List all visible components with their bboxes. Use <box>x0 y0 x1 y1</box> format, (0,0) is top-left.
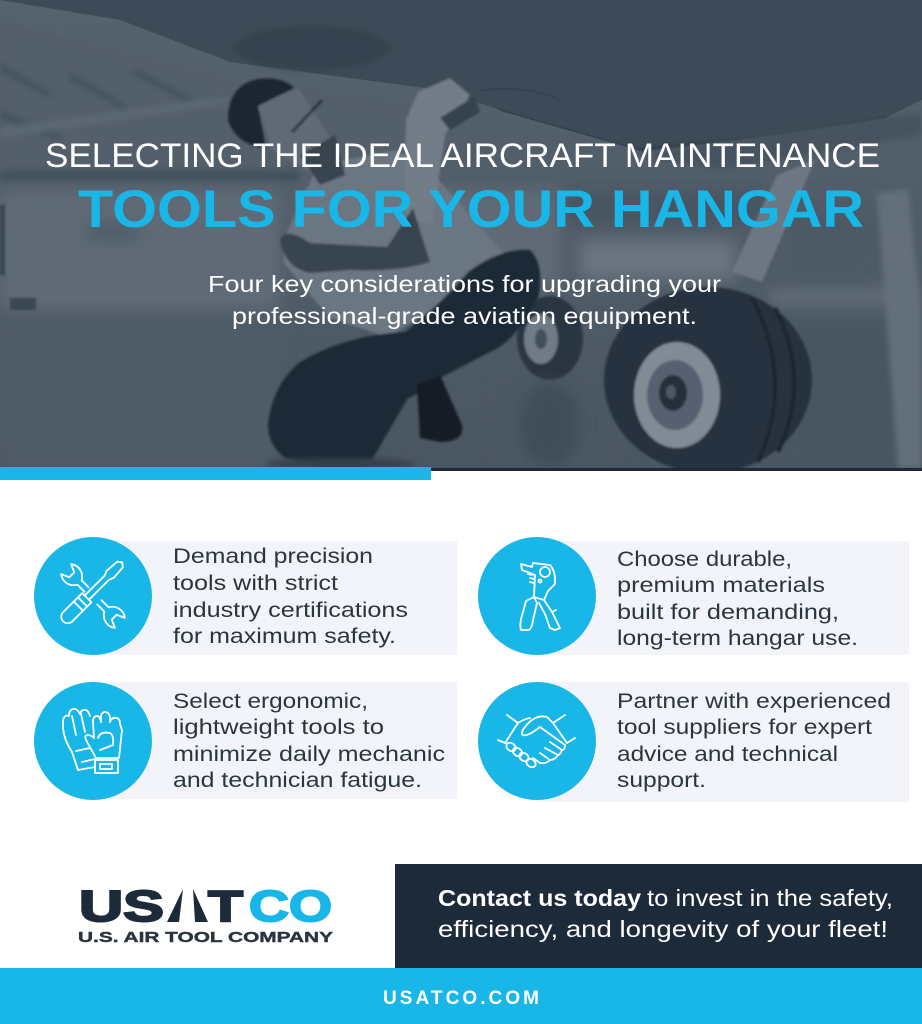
hero accent bar <box>0 467 431 480</box>
text: and technician fatigue. <box>173 769 422 792</box>
boot <box>417 375 462 442</box>
panel: call to action <box>395 864 922 968</box>
hero photo: aircraft mechanic under wing <box>0 0 922 473</box>
text: Choose durable, <box>617 548 792 571</box>
icon: handshake <box>498 715 575 769</box>
text: long-term hangar use. <box>617 627 858 650</box>
text: Select ergonomic, <box>173 690 368 713</box>
panel: durable materials <box>478 537 909 655</box>
glasses frame <box>292 100 322 132</box>
text: Partner with experienced <box>617 690 891 713</box>
subtitle <box>208 271 721 329</box>
main wheel <box>604 287 812 473</box>
raised arm and hand <box>404 78 470 181</box>
hangar wall and floor tones <box>0 192 884 310</box>
text: advice and technical <box>617 743 838 766</box>
footer bar with website <box>0 968 922 1024</box>
text: Demand precision <box>173 545 373 568</box>
text: industry certifications <box>173 599 408 622</box>
text: minimize daily mechanic <box>173 743 445 766</box>
logo: USATCO: CO <box>249 882 332 931</box>
wing underside <box>0 0 922 150</box>
torso vest <box>283 150 505 337</box>
logo: USATCO <box>78 882 333 946</box>
text: premium materials <box>617 574 825 597</box>
text <box>617 690 891 792</box>
text: support. <box>617 769 706 792</box>
subtitle: Four key considerations for upgrading your <box>208 271 721 297</box>
hair and beard <box>228 78 294 148</box>
panel: call to action: efficiency, and longevity of your fleet! <box>438 916 888 942</box>
mechanic figure <box>228 78 540 464</box>
icon: rivet gun <box>520 563 560 630</box>
icon: work gloves <box>63 709 122 773</box>
logo: USATCO: U.S. AIR TOOL COMPANY <box>78 929 333 946</box>
panel: call to action: Contact us today <box>438 885 641 911</box>
logo: USATCO: T <box>208 882 243 931</box>
subtitle: professional-grade aviation equipment. <box>232 303 697 329</box>
panel: precision tools <box>34 537 457 655</box>
title: TOOLS FOR YOUR HANGAR <box>78 180 864 239</box>
logo: USATCO: US <box>79 882 164 931</box>
icon: wrench and screwdriver <box>59 558 127 630</box>
text: built for demanding, <box>617 601 839 624</box>
text <box>617 548 858 650</box>
panel: call to action: to invest in the safety, <box>647 885 893 911</box>
title <box>45 137 880 239</box>
face and glasses lens <box>257 88 329 172</box>
trousers <box>268 250 540 464</box>
panel: ergonomic tools <box>34 682 457 800</box>
landing gear strut <box>732 160 815 282</box>
footer bar with website: USATCO.COM <box>383 988 539 1009</box>
dark sleeve <box>280 208 430 273</box>
text: lightweight tools to <box>173 716 384 739</box>
hangar ceiling <box>0 64 299 182</box>
panel: experienced suppliers <box>478 682 909 802</box>
text: for maximum safety. <box>173 625 396 648</box>
text: tools with strict <box>173 572 338 595</box>
text <box>173 690 445 792</box>
text <box>173 545 408 648</box>
title: SELECTING THE IDEAL AIRCRAFT MAINTENANCE <box>45 137 880 175</box>
text: tool suppliers for expert <box>617 716 872 739</box>
small rear wheel <box>517 296 583 380</box>
